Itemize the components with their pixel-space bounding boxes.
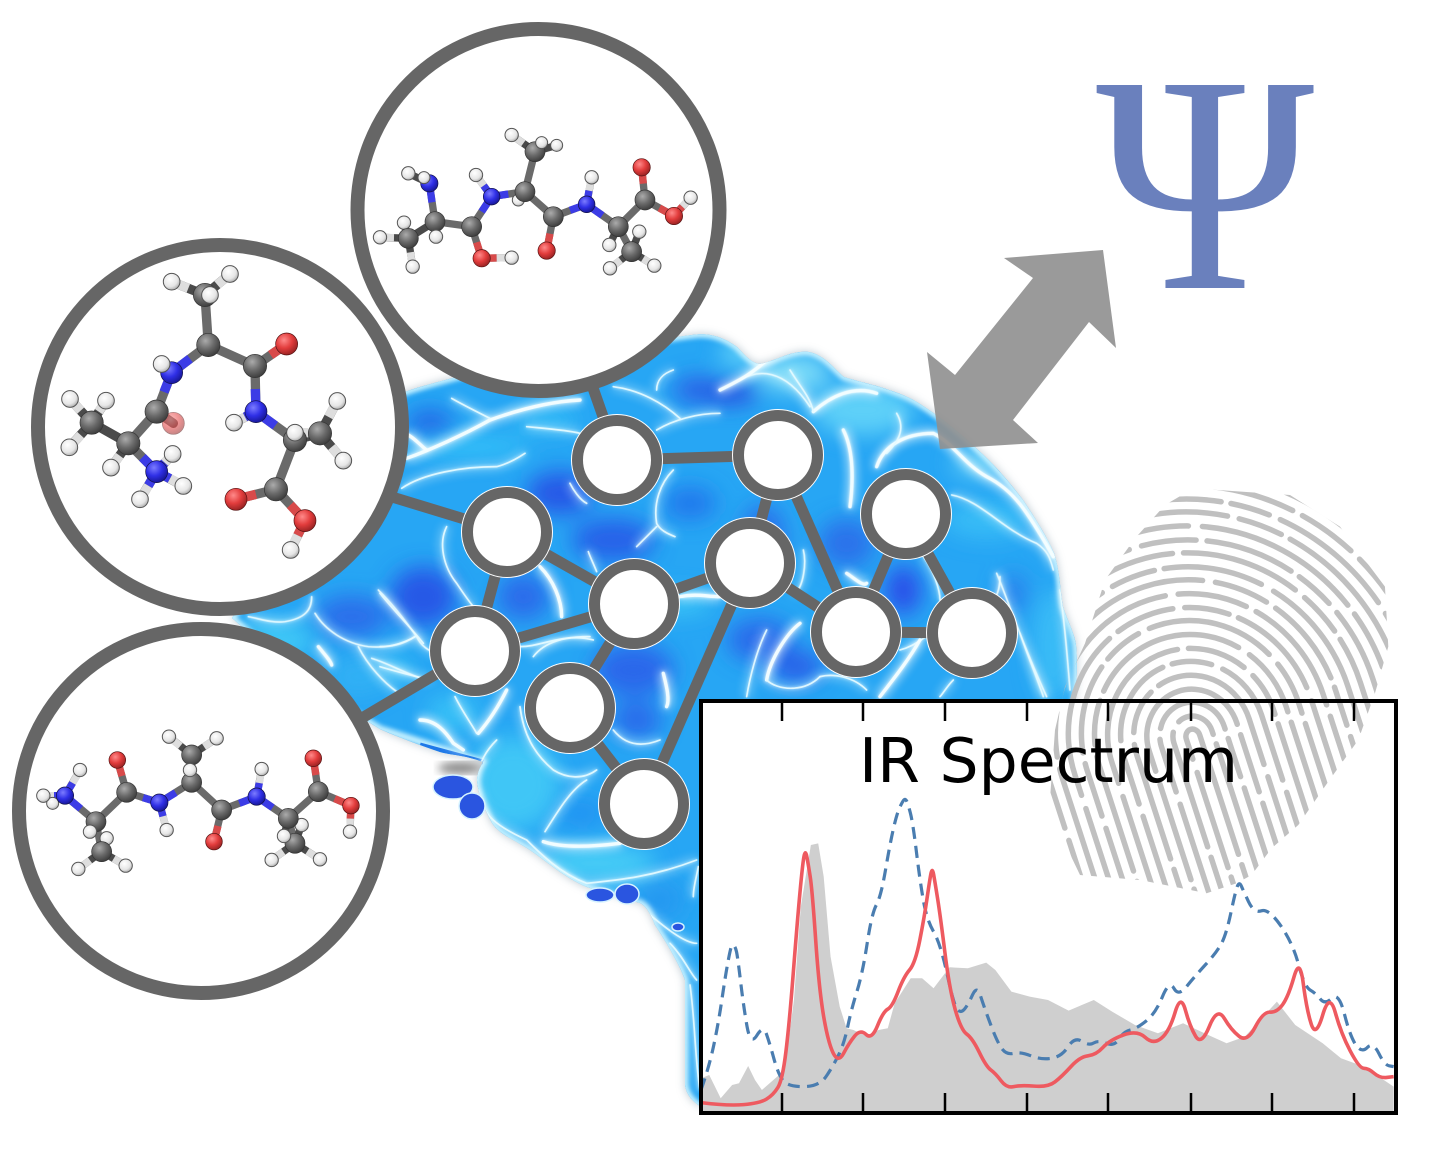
spectrum: reference gray area bbox=[701, 843, 1394, 1112]
circle: molecule conformer top bbox=[358, 29, 720, 391]
brain folds bbox=[248, 357, 1070, 1090]
double-headed arrow bbox=[927, 250, 1116, 449]
spectrum: blue dashed curve bbox=[701, 799, 1394, 1090]
fingerprint bbox=[1050, 490, 1388, 894]
plot background bbox=[701, 701, 1396, 1113]
brain pale rim bbox=[232, 334, 1077, 1106]
spectrum: red curve bbox=[701, 853, 1394, 1105]
circle: molecule conformer left bbox=[38, 245, 402, 609]
plot title: IR Spectrum bbox=[859, 725, 1238, 797]
molecule bottom bbox=[37, 730, 359, 876]
molecule top bbox=[373, 128, 697, 275]
brain tonal patches bbox=[235, 340, 1073, 918]
network nodes bbox=[429, 409, 1018, 850]
brain illustration bbox=[200, 320, 1100, 1120]
brain small dark blobs bbox=[433, 775, 684, 931]
molecule left bbox=[61, 266, 352, 558]
circle: molecule conformer bottom bbox=[19, 629, 383, 993]
network connection lines bbox=[362, 388, 972, 804]
IR spectrum plot bbox=[699, 490, 1398, 1115]
plot frame and ticks bbox=[701, 701, 1396, 1113]
psi symbol: Ψ bbox=[1096, 12, 1318, 356]
